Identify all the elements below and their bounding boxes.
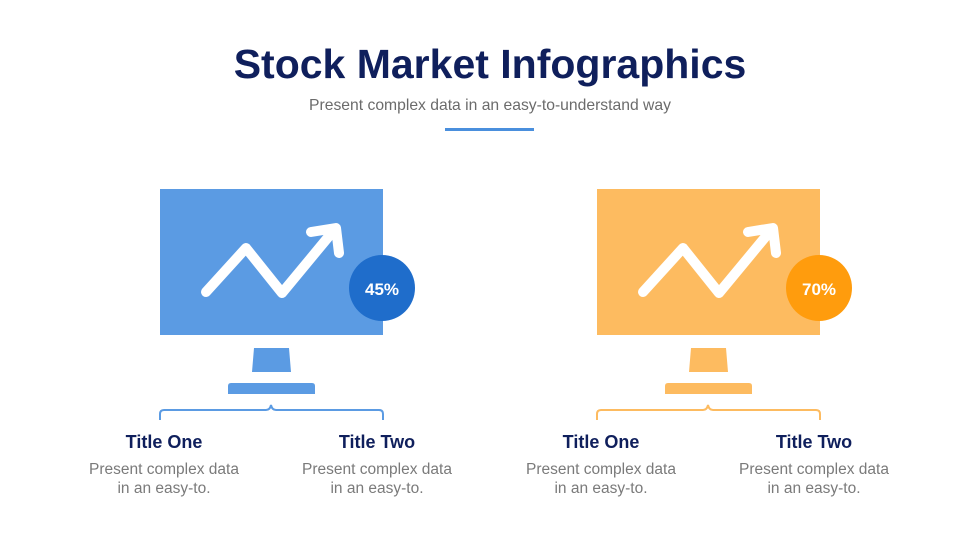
text: left desc two: [302, 461, 452, 497]
text: left desc one: in an easy-to.: [117, 480, 211, 497]
heading: left title two: Title Two: [339, 432, 415, 452]
title: Stock Market Infographics: [234, 41, 746, 87]
text: left desc one: [89, 461, 239, 497]
text: left desc one: Present complex data: [89, 461, 239, 478]
subtitle: Present complex data in an easy-to-understand way: [309, 97, 671, 114]
text: left desc two: Present complex data: [302, 461, 452, 478]
heading: right title two: Title Two: [776, 432, 852, 452]
text: right desc one: in an easy-to.: [554, 480, 648, 497]
monitor: orange: 70%: [802, 280, 836, 299]
heading: left title one: Title One: [126, 432, 202, 452]
text: right desc one: Present complex data: [526, 461, 676, 478]
text: right desc one: [526, 461, 676, 497]
text: right desc two: in an easy-to.: [767, 480, 861, 497]
text: left desc two: in an easy-to.: [330, 480, 424, 497]
monitor: orange: [596, 189, 852, 420]
text: right desc two: [739, 461, 889, 497]
divider line: [445, 128, 534, 131]
heading: right title one: Title One: [563, 432, 639, 452]
monitor: blue: 45%: [365, 280, 399, 299]
text: right desc two: Present complex data: [739, 461, 889, 478]
